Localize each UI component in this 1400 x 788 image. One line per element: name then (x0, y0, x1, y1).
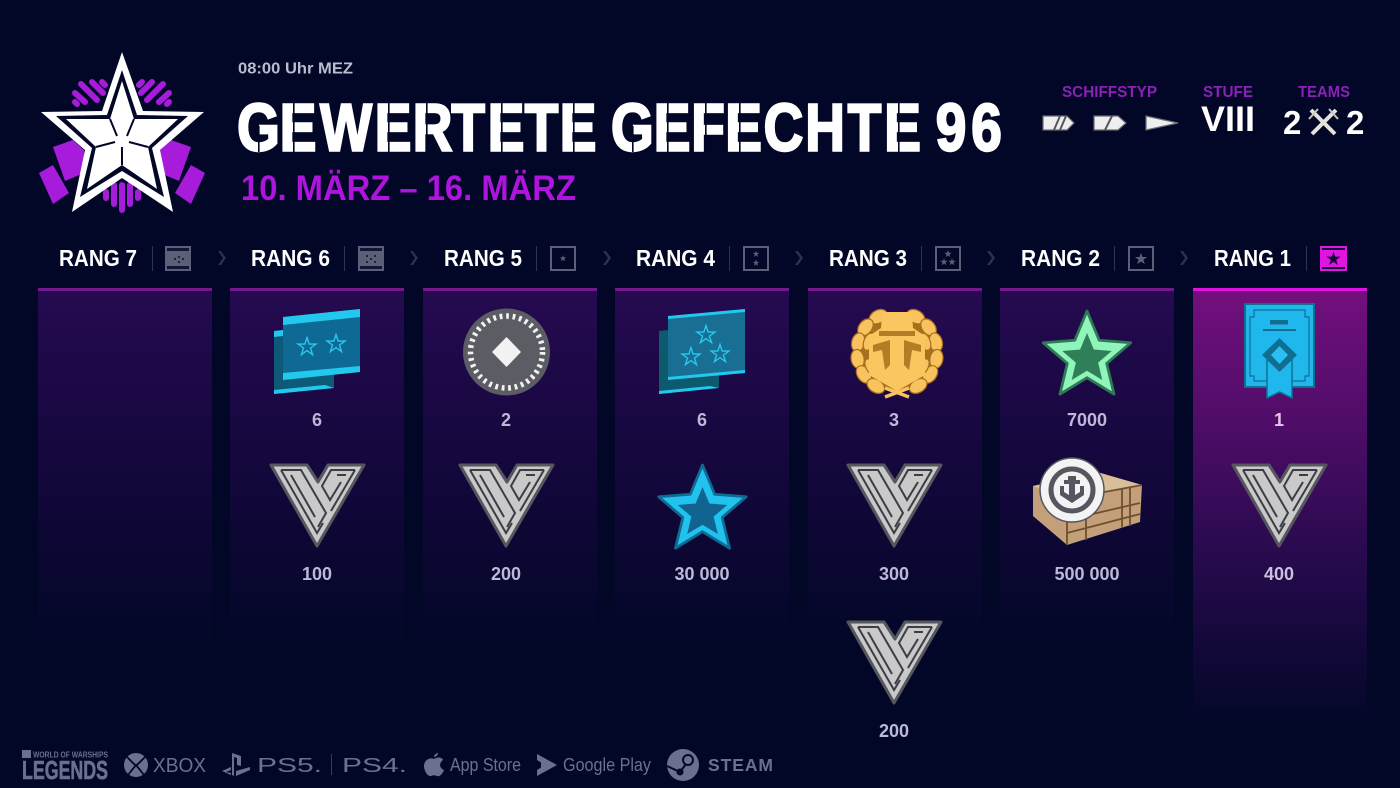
value: medals: 3 (889, 410, 899, 430)
arrow 5 to 4 (603, 251, 611, 265)
arrow 7 to 6 (218, 251, 226, 265)
icon: green star (1043, 311, 1131, 394)
footer: google play: Google Play (563, 755, 651, 775)
rank 2 header: RANG 2 (1021, 245, 1100, 271)
rank 5 header (444, 245, 575, 271)
info: ship type: SCHIFFSTYP (1062, 84, 1157, 101)
info: tier: STUFE (1203, 84, 1253, 101)
icon: silver coin (463, 308, 550, 396)
rank 1 header (1214, 245, 1347, 271)
footer: steam: STEAM (708, 755, 773, 775)
arrow 2 to 1 (1180, 251, 1188, 265)
info: teams (1283, 84, 1364, 141)
arrow 6 to 5 (410, 251, 418, 265)
info: ship type (1043, 84, 1178, 130)
rank 6 header (251, 245, 384, 271)
date range: 10. MÄRZ – 16. MÄRZ (241, 169, 576, 208)
footer: legends logo: WORLD OF WARSHIPS (33, 750, 109, 760)
footer: legends logo: LEGENDS (22, 755, 108, 785)
icon: V badge (271, 465, 364, 546)
footer: playstation: PS5. (257, 755, 322, 777)
value: stars: 400 (1264, 564, 1294, 584)
extra reward value: 200 (879, 721, 909, 741)
info: teams: 2 (1283, 104, 1301, 141)
icon: V badge (1233, 465, 1326, 546)
rank 6 header: RANG 6 (251, 245, 330, 271)
extra reward: V badge rank 3 (848, 622, 941, 703)
footer: google play (537, 754, 651, 776)
rank 7 header (59, 245, 191, 271)
panel: rank 1 (1193, 288, 1367, 726)
footer: xbox (124, 753, 206, 777)
info: teams: 2 (1346, 104, 1364, 141)
value: stars: 200 (491, 564, 521, 584)
info: tier: VIII (1201, 100, 1255, 139)
value: stars: 300 (879, 564, 909, 584)
icon: V badge (848, 465, 941, 546)
value: credits: 30 000 (674, 564, 730, 584)
value: credits: 500 000 (1054, 564, 1120, 584)
footer: app store: App Store (450, 755, 521, 775)
panel: rank 6 (230, 288, 404, 651)
time label: 08:00 Uhr MEZ (238, 60, 354, 78)
value: coins: 2 (501, 410, 511, 430)
arrow 4 to 3 (795, 251, 803, 265)
rank 1 header: RANG 1 (1214, 245, 1291, 271)
icon: V badge (460, 465, 553, 546)
footer: playstation (222, 753, 407, 777)
info: teams: TEAMS (1298, 84, 1350, 101)
footer: xbox: XBOX (153, 755, 206, 777)
value: flags: 6 (312, 410, 322, 430)
value: certificate: 1 (1274, 410, 1284, 430)
arrow 3 to 2 (987, 251, 995, 265)
rank 4 header (636, 245, 768, 271)
rank 2 header (1021, 245, 1153, 271)
info: tier (1201, 84, 1255, 139)
value: stars: 100 (302, 564, 332, 584)
footer: playstation: PS4. (342, 755, 407, 777)
panel: rank 3 (808, 288, 982, 651)
panel: rank 4 (615, 288, 789, 651)
panel: rank 7 (38, 288, 212, 651)
value: elite xp: 7000 (1067, 410, 1107, 430)
icon: blue certificate (1245, 304, 1314, 398)
icon: two star flag (274, 309, 360, 394)
icon: three star flag (659, 309, 745, 394)
logo: star emblem (39, 52, 205, 212)
rank 5 header: RANG 5 (444, 245, 522, 271)
rank 3 header (829, 245, 960, 271)
footer: app store (424, 753, 521, 776)
icon: crate with coin (1033, 458, 1142, 545)
value: flags: 6 (697, 410, 707, 430)
icon: gold laurel medal (850, 306, 944, 397)
icon: blue star (659, 465, 746, 548)
rank 7 header: RANG 7 (59, 245, 137, 271)
rank 3 header: RANG 3 (829, 245, 907, 271)
panel: rank 5 (423, 288, 597, 651)
title: GEWERTETE GEFECHTE 96 (237, 90, 1002, 165)
footer: legends logo (22, 750, 109, 785)
footer: steam (667, 749, 773, 781)
rank 4 header: RANG 4 (636, 245, 715, 271)
panel: rank 2 (1000, 288, 1174, 651)
